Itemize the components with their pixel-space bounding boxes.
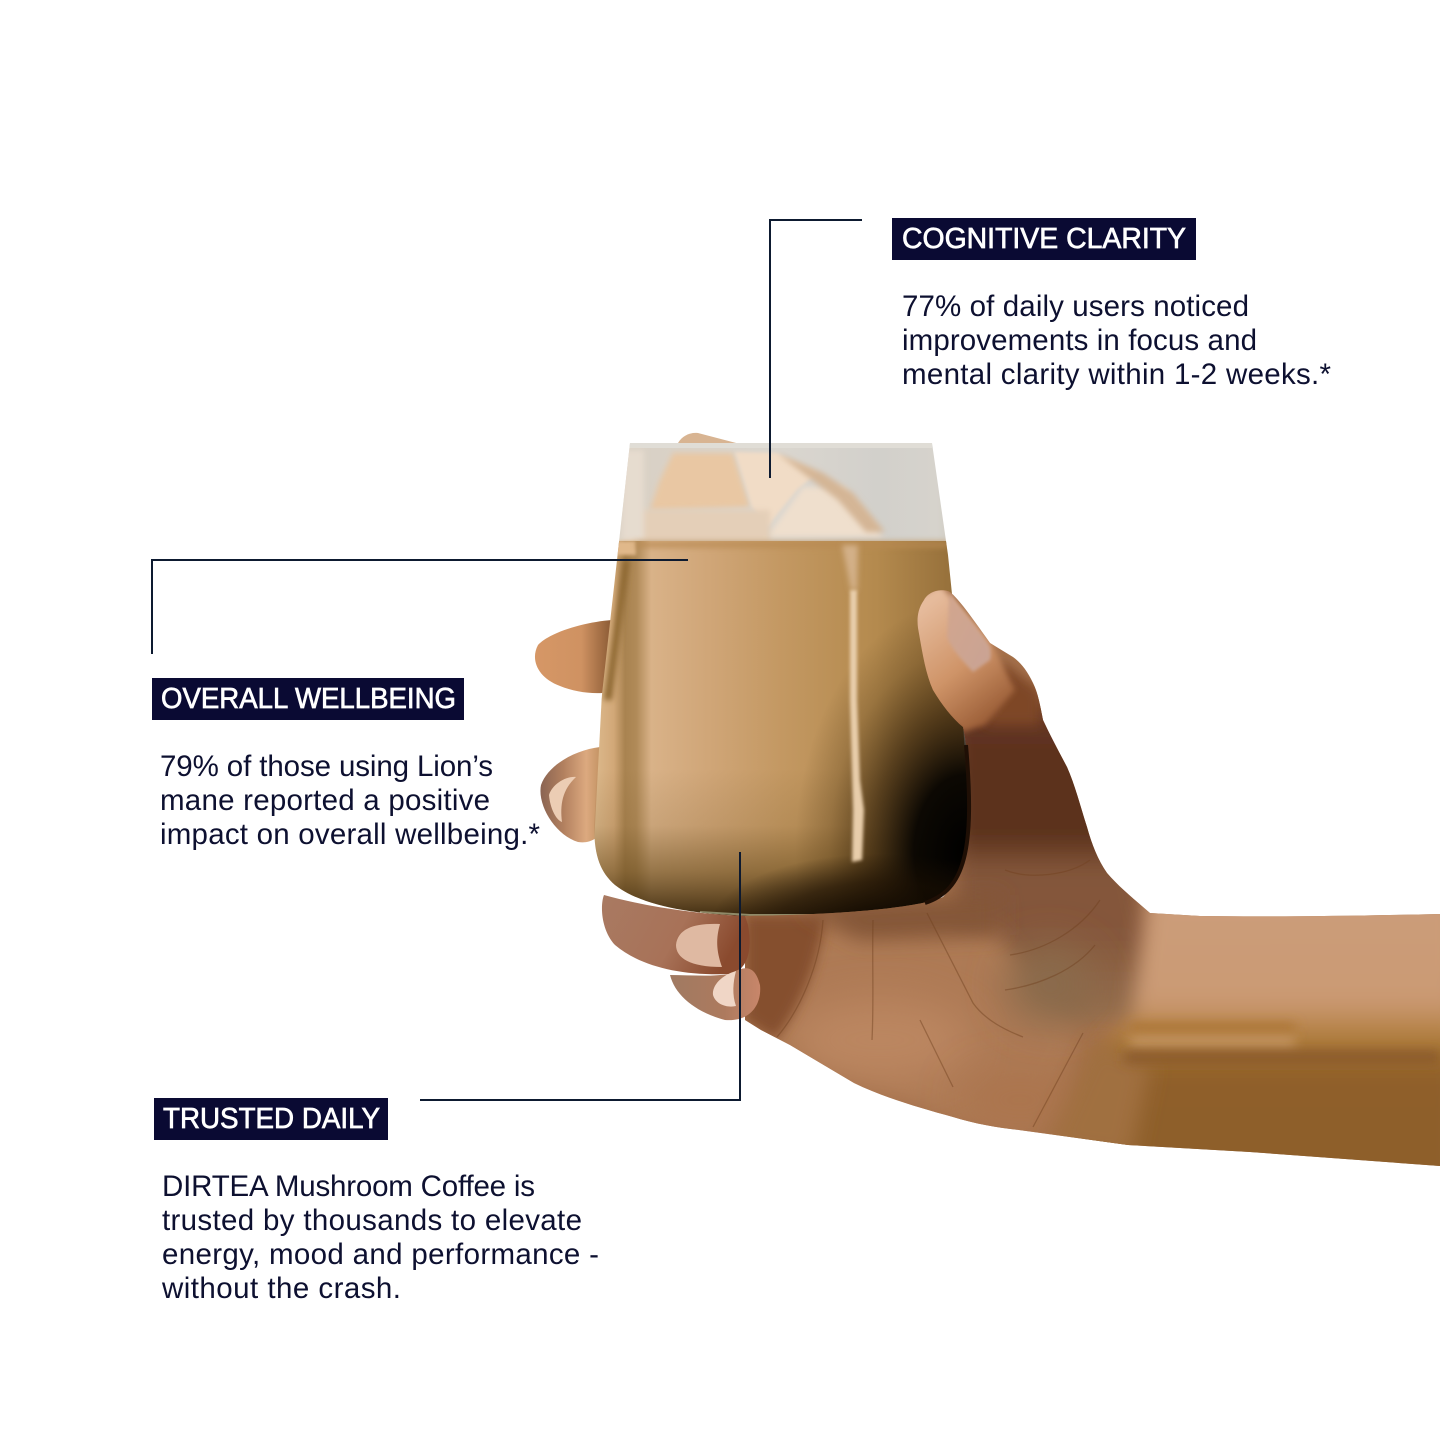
text: overall wellbeing stat: mane reported a positive [160, 784, 490, 817]
text: trusted daily description: DIRTEA Mushroom Coffee is [162, 1170, 535, 1203]
palm shading [760, 925, 1080, 1135]
text: overall wellbeing stat [160, 750, 541, 851]
label: cognitive clarity: COGNITIVE CLARITY [902, 223, 1186, 255]
bottom finger nail [713, 971, 736, 1007]
text: cognitive clarity stat: improvements in focus and [902, 324, 1257, 357]
text: trusted daily description: energy, mood and performance - [162, 1238, 599, 1271]
lower finger [602, 895, 750, 974]
label: trusted daily: TRUSTED DAILY [163, 1103, 380, 1135]
ice lump above rim [678, 433, 740, 444]
lower finger nail [676, 924, 722, 967]
bottom finger [670, 968, 760, 1020]
callout line: cognitive clarity [770, 220, 862, 478]
thumb and wrist shading [950, 700, 1170, 1020]
ice cubes [650, 453, 750, 510]
text: cognitive clarity stat: 77% of daily users noticed [902, 290, 1249, 323]
forearm shading [1085, 903, 1440, 1166]
text: overall wellbeing stat: impact on overall wellbeing.* [160, 818, 541, 851]
thumb nail [947, 593, 991, 672]
second finger [540, 747, 606, 842]
second finger nail [549, 777, 576, 822]
glass of coffee [590, 440, 975, 925]
palm creases [777, 860, 1100, 1127]
text: trusted daily description: trusted by thousands to elevate [162, 1204, 582, 1237]
glass base highlight [700, 911, 812, 916]
callout line: overall wellbeing [152, 560, 688, 654]
text: cognitive clarity stat: mental clarity within 1-2 weeks.* [902, 358, 1332, 391]
text: trusted daily description [161, 1170, 599, 1305]
label: overall wellbeing: OVERALL WELLBEING [161, 683, 456, 715]
thumb knuckle [985, 660, 1040, 725]
photo: hand holding iced coffee glass [535, 433, 1440, 1190]
hand and forearm [740, 580, 1440, 1190]
callout line: trusted daily [420, 852, 740, 1100]
text: trusted daily description: without the crash. [161, 1272, 401, 1305]
top finger [535, 620, 612, 693]
text: cognitive clarity stat [902, 290, 1332, 391]
thumb tip [912, 585, 1015, 732]
text: overall wellbeing stat: 79% of those using Lion’s [160, 750, 493, 783]
coffee [590, 541, 975, 920]
glass right edge shadow [925, 745, 969, 903]
milk streak [842, 545, 858, 590]
